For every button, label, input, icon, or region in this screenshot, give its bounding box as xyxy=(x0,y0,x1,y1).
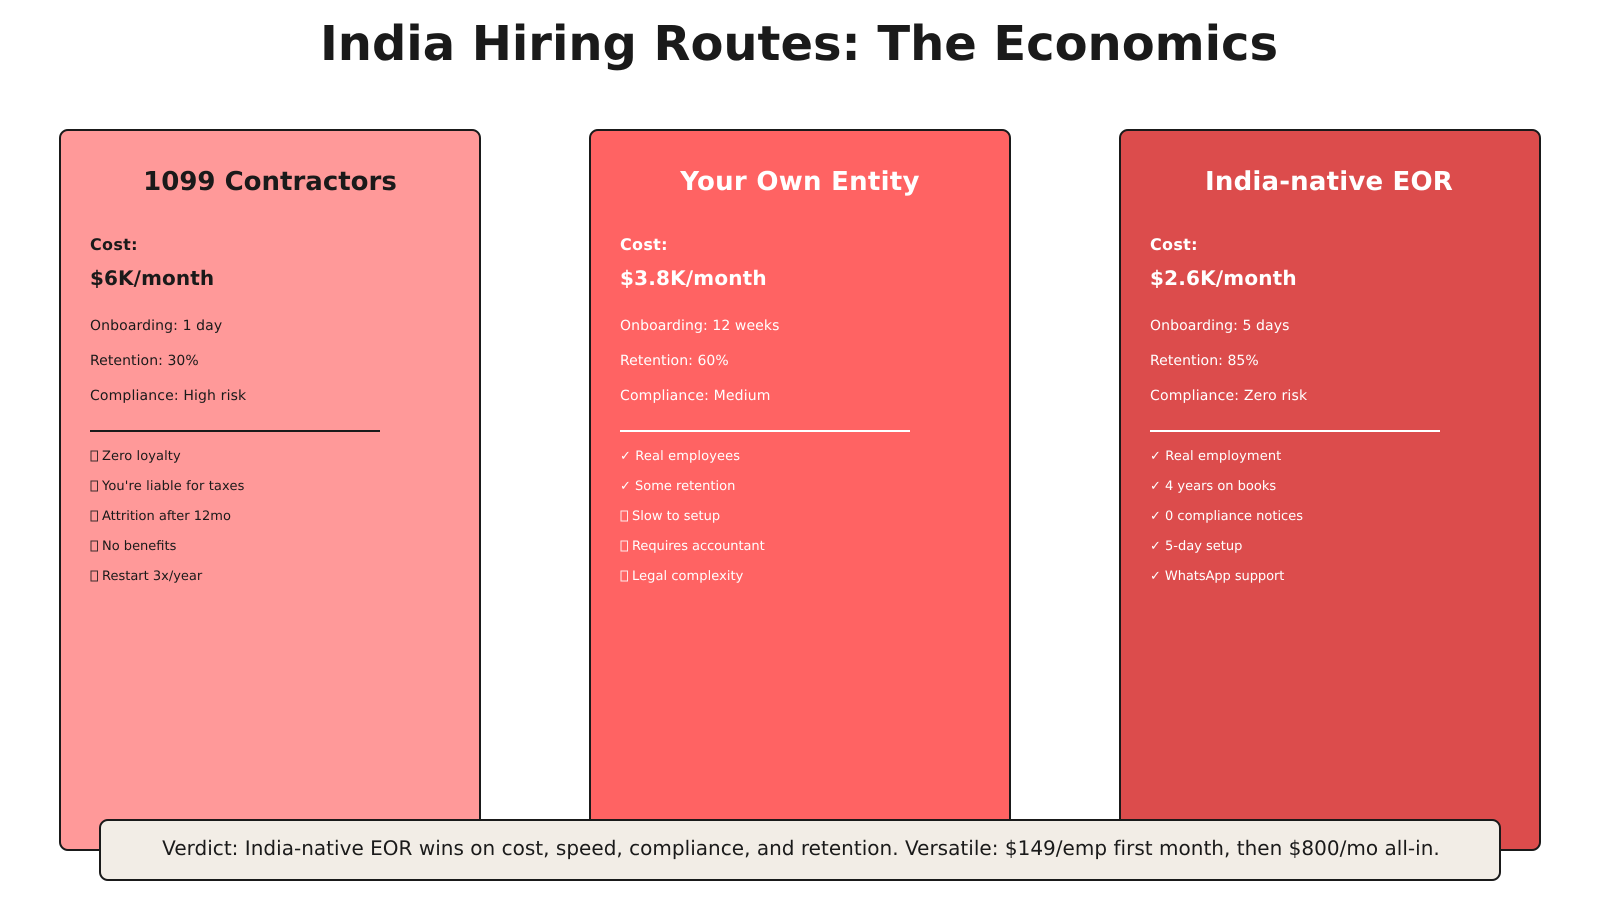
metrics: Onboarding: 1 day xyxy=(90,318,222,334)
panel: 1099 Contractors xyxy=(60,130,480,850)
title: India Hiring Routes: The Economics xyxy=(320,16,1278,72)
metrics xyxy=(1150,318,1308,404)
metrics: Onboarding: 5 days xyxy=(1150,318,1290,334)
metrics: Compliance: High risk xyxy=(90,388,247,404)
metrics: Compliance: Zero risk xyxy=(1150,388,1308,404)
feature list: ✓ Real employees xyxy=(620,449,740,464)
cost xyxy=(1150,235,1297,290)
feature list: Zero loyalty xyxy=(102,449,181,464)
cost xyxy=(90,235,214,290)
feature list xyxy=(91,449,245,584)
panel heading: 1099 Contractors xyxy=(143,167,397,197)
feature list: Restart 3x/year xyxy=(102,569,203,584)
feature list: Legal complexity xyxy=(632,569,744,584)
feature list: ✓ 5-day setup xyxy=(1150,539,1242,554)
feature list: ✓ 4 years on books xyxy=(1150,479,1276,494)
cost: $2.6K/month xyxy=(1150,266,1297,290)
metrics: Compliance: Medium xyxy=(620,388,771,404)
feature list: You're liable for taxes xyxy=(101,479,245,494)
panel: Your Own Entity xyxy=(590,130,1010,850)
panel heading: Your Own Entity xyxy=(679,167,920,197)
metrics: Onboarding: 12 weeks xyxy=(620,318,779,334)
verdict text: Verdict: India-native EOR wins on cost, speed, compliance, and retention. Versatile: $149/emp first month, then $800/mo all-in. xyxy=(162,836,1440,860)
feature list: Requires accountant xyxy=(632,539,765,554)
feature list: Slow to setup xyxy=(632,509,720,524)
cost: $6K/month xyxy=(90,266,214,290)
cost xyxy=(620,235,767,290)
feature list: ✓ Some retention xyxy=(620,479,735,494)
metrics: Retention: 85% xyxy=(1150,353,1259,369)
metrics xyxy=(620,318,779,404)
feature list: ✓ WhatsApp support xyxy=(1150,569,1284,584)
cost: Cost: xyxy=(620,235,668,254)
feature list: No benefits xyxy=(102,539,177,554)
feature list xyxy=(1150,449,1303,584)
feature list: ✓ 0 compliance notices xyxy=(1150,509,1303,524)
panel: India-native EOR xyxy=(1120,130,1540,850)
feature list: ✓ Real employment xyxy=(1150,449,1281,464)
cost: Cost: xyxy=(90,235,138,254)
verdict callout xyxy=(100,820,1500,880)
feature list xyxy=(620,449,765,584)
panel heading: India-native EOR xyxy=(1205,167,1453,197)
cost: $3.8K/month xyxy=(620,266,767,290)
metrics: Retention: 60% xyxy=(620,353,729,369)
metrics xyxy=(90,318,247,404)
metrics: Retention: 30% xyxy=(90,353,199,369)
feature list: Attrition after 12mo xyxy=(102,509,231,524)
cost: Cost: xyxy=(1150,235,1198,254)
